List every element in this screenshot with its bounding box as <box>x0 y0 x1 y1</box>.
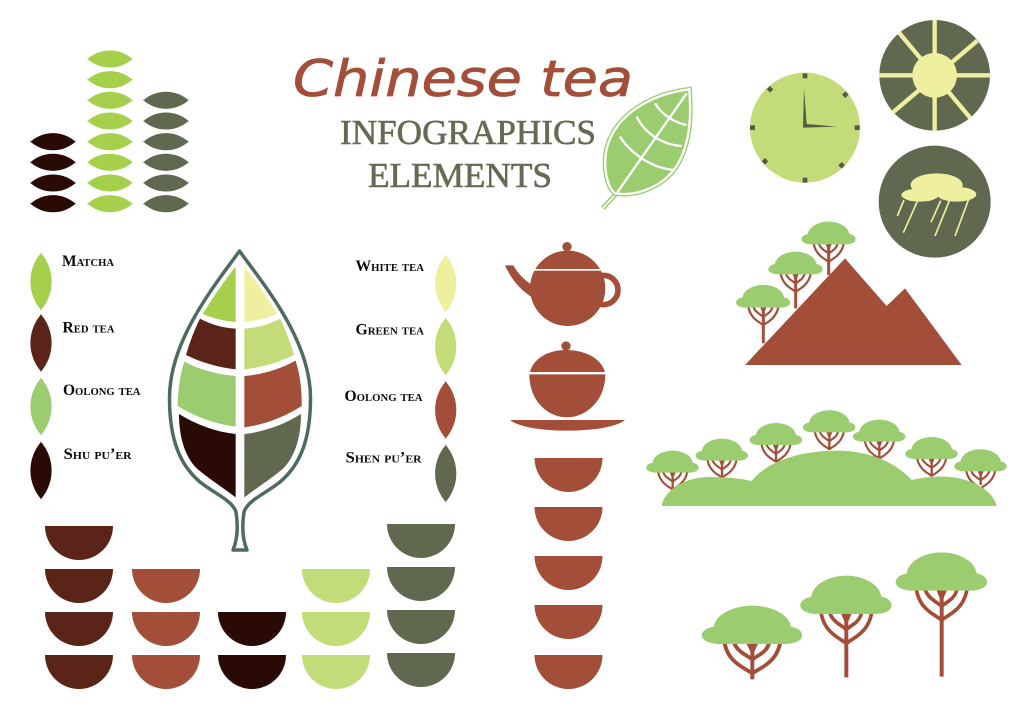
column 4 <box>302 569 370 689</box>
tree size set <box>702 552 987 679</box>
bowl chart <box>45 524 455 689</box>
icon: green tea leaf <box>435 318 456 376</box>
leaf segments <box>178 267 302 497</box>
label: oolong tea: Oolong tea <box>344 388 423 405</box>
subtitle line 2: ELEMENTS <box>368 156 552 195</box>
icon: rain cloud <box>879 146 991 258</box>
column 5 <box>387 524 455 687</box>
legend: right <box>344 254 456 502</box>
hill row trees <box>646 410 1007 490</box>
green column <box>87 50 133 212</box>
tall tree <box>896 552 987 677</box>
tree 3 <box>736 285 790 343</box>
icon: red tea leaf <box>30 314 52 372</box>
column 3 <box>218 612 286 689</box>
olive column <box>143 92 189 212</box>
label: matcha: Matcha <box>62 253 114 270</box>
icon: sun <box>879 20 990 131</box>
label: shu pu'er: Shu pu’er <box>64 446 133 463</box>
icon: matcha leaf <box>30 252 52 310</box>
title: Chinese tea <box>293 50 633 108</box>
icon: teapot <box>505 242 618 326</box>
tree 1 <box>801 222 856 275</box>
stacked terracotta bowls <box>534 458 602 689</box>
label: red tea: Red tea <box>62 320 115 337</box>
mountain <box>745 258 962 365</box>
central leaf diagram <box>170 251 310 550</box>
small tree <box>702 606 802 679</box>
icon: clock <box>750 73 860 183</box>
icon: title leaf <box>603 89 690 208</box>
label: oolong tea: Oolong tea <box>63 382 141 399</box>
medium tree <box>800 576 892 677</box>
leaf bar chart <box>30 50 189 212</box>
column 2 <box>132 569 200 689</box>
icon: lidded cup and saucer <box>510 341 625 431</box>
column 1 <box>45 526 113 689</box>
tree 2 <box>768 252 823 308</box>
legend: left <box>30 252 141 500</box>
subtitle line 1: INFOGRAPHICS <box>340 113 596 152</box>
dark column <box>30 133 76 212</box>
icon: shen pu'er leaf <box>435 444 456 502</box>
label: white tea: White tea <box>356 258 424 275</box>
icon: white tea leaf <box>435 254 456 312</box>
mountains with trees <box>736 222 962 365</box>
label: green tea: Green tea <box>356 321 424 338</box>
label: shen pu'er: Shen pu’er <box>346 450 423 467</box>
hills with trees <box>646 410 1007 506</box>
hills <box>662 451 997 506</box>
leaf outline <box>170 251 310 550</box>
icon: oolong leaf <box>30 378 52 436</box>
icon: oolong leaf <box>435 381 456 439</box>
icon: shu pu'er leaf <box>30 442 52 500</box>
